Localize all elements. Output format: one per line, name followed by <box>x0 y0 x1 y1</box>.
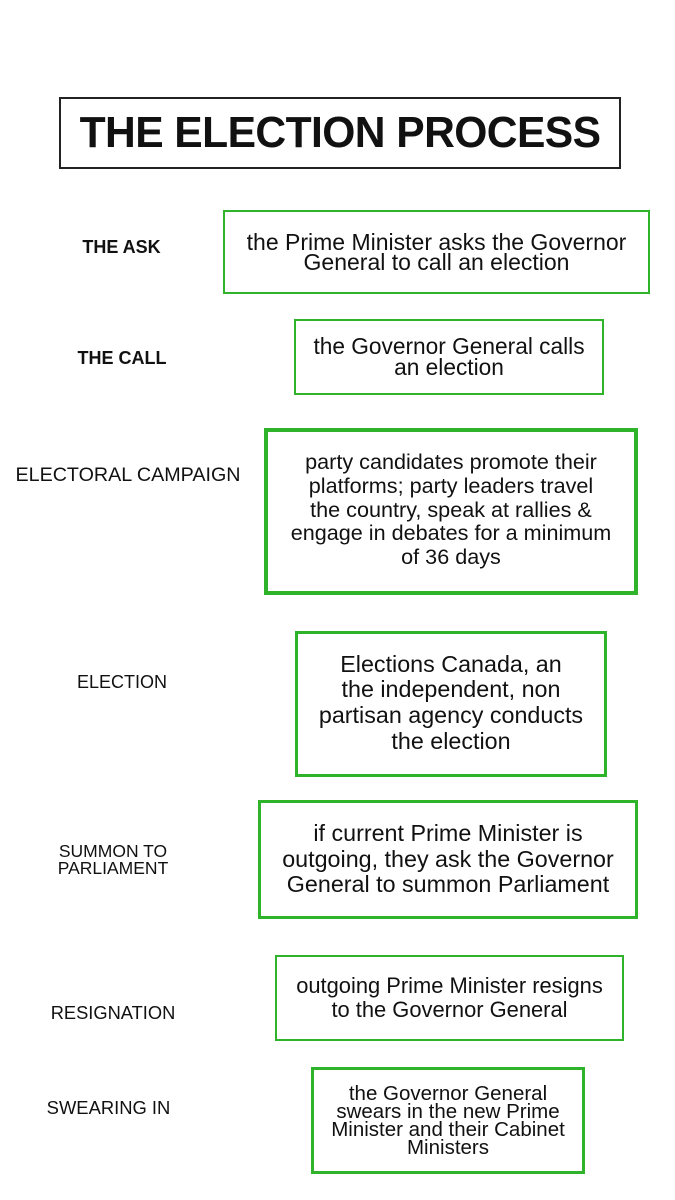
box: electoral campaign: engage in debates for a minimum <box>291 520 611 545</box>
box: resignation: to the Governor General <box>331 997 568 1022</box>
label: election: ELECTION <box>77 672 167 692</box>
box: election: the independent, non <box>342 676 560 702</box>
box: swearing in: Ministers <box>407 1136 489 1158</box>
title: THE ELECTION PROCESS <box>80 108 600 157</box>
box: resignation <box>275 955 624 1041</box>
label: electoral campaign: ELECTORAL CAMPAIGN <box>15 464 240 486</box>
label: the call: THE CALL <box>78 348 166 368</box>
box: the call <box>294 319 604 395</box>
box: summon to parliament <box>258 800 638 919</box>
box: election: partisan agency conducts <box>319 702 583 728</box>
label: summon to parliament: SUMMON TO <box>59 841 167 861</box>
box: the ask: General to call an election <box>304 249 569 275</box>
box: the ask: the Prime Minister asks the Governor <box>247 228 626 254</box>
box: electoral campaign: the country, speak at rallies & <box>310 497 592 522</box>
box: electoral campaign: platforms; party leaders travel <box>309 473 593 498</box>
box: electoral campaign: party candidates promote their <box>305 449 597 474</box>
label: the ask: THE ASK <box>82 237 161 257</box>
label: resignation: RESIGNATION <box>51 1002 175 1023</box>
box: electoral campaign <box>264 428 638 595</box>
box: summon to parliament: outgoing, they ask the Governor <box>282 846 614 872</box>
label: summon to parliament <box>58 841 168 878</box>
label: swearing in: SWEARING IN <box>47 1097 170 1118</box>
box: swearing in: the Governor General <box>349 1082 547 1104</box>
box: the call: an election <box>394 354 504 380</box>
box: election: Elections Canada, an <box>340 651 562 677</box>
box: the call: the Governor General calls <box>313 333 585 359</box>
title <box>59 97 621 169</box>
box: summon to parliament: General to summon Parliament <box>287 871 609 897</box>
box: electoral campaign: of 36 days <box>401 544 501 569</box>
box: resignation: outgoing Prime Minister resigns <box>296 973 603 998</box>
box: summon to parliament: if current Prime Minister is <box>313 820 583 846</box>
box: election <box>295 631 607 777</box>
box: swearing in <box>311 1067 585 1174</box>
box: swearing in: Minister and their Cabinet <box>331 1118 565 1140</box>
box: the ask <box>223 210 650 294</box>
box: election: the election <box>391 728 511 754</box>
box: swearing in: swears in the new Prime <box>336 1100 560 1122</box>
label: summon to parliament: PARLIAMENT <box>58 858 168 878</box>
